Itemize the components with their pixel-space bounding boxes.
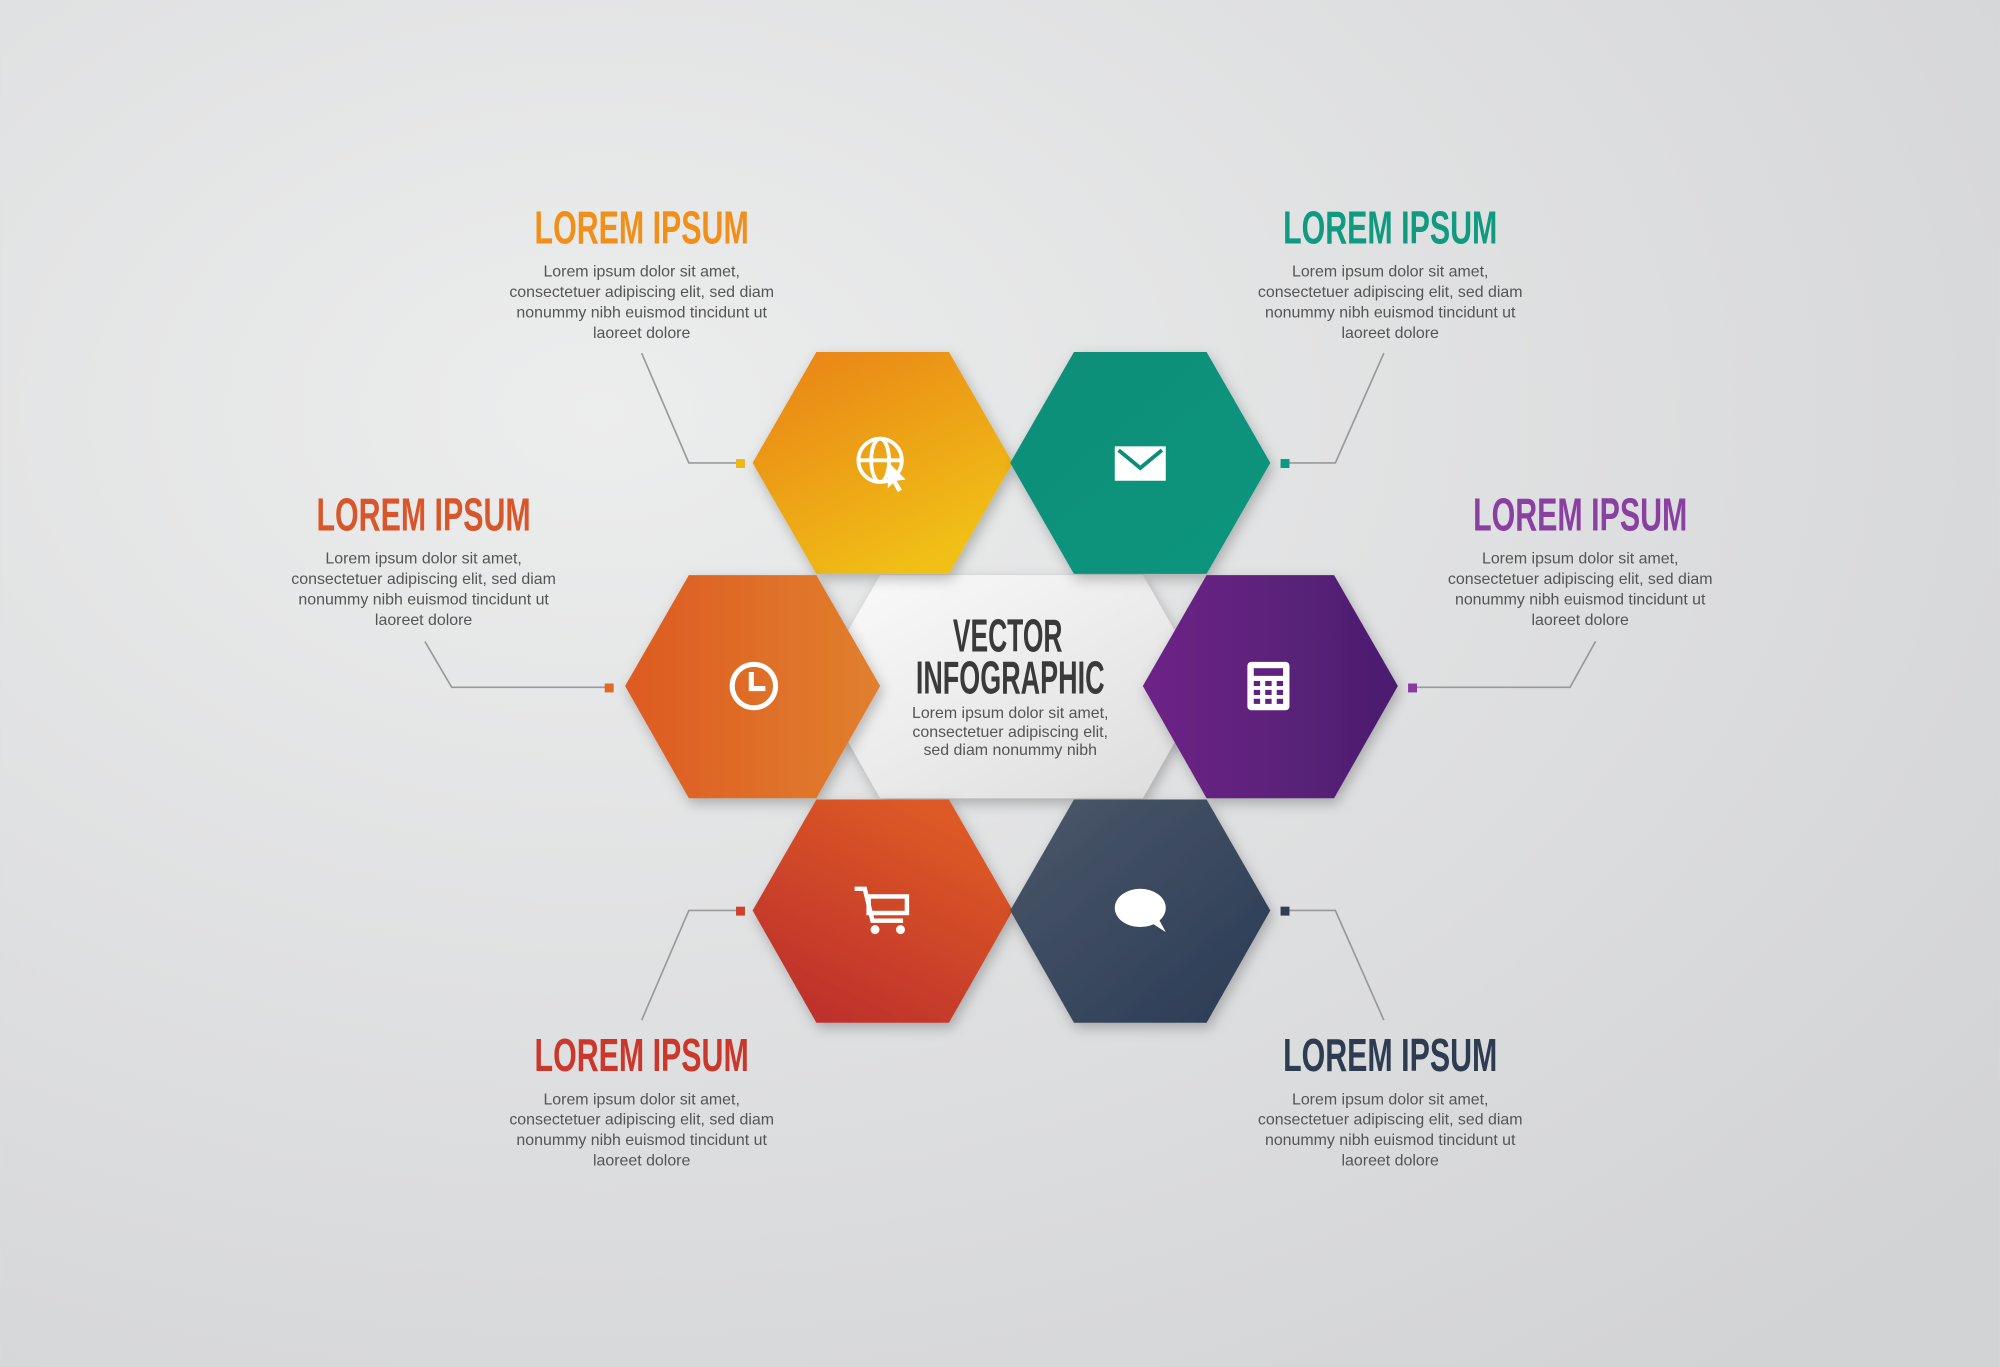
hexagon: purple calculator bbox=[1143, 575, 1398, 798]
text block: top right: laoreet dolore bbox=[1342, 325, 1439, 342]
hexagon: orange globe bbox=[753, 352, 1013, 574]
icon: cart bbox=[855, 889, 907, 921]
text block: bottom left: LOREM IPSUM bbox=[535, 1029, 749, 1081]
center text: consectetuer adipiscing elit, bbox=[912, 724, 1108, 741]
text block: bottom left: laoreet dolore bbox=[593, 1153, 690, 1170]
text block: bottom left: consectetuer adipiscing elit, sed diam bbox=[509, 1112, 774, 1129]
text block: top right: Lorem ipsum dolor sit amet, bbox=[1292, 264, 1488, 281]
center text: INFOGRAPHIC bbox=[916, 652, 1105, 704]
hexagon: teal mail bbox=[1010, 352, 1270, 574]
text block: bottom right: LOREM IPSUM bbox=[1283, 1029, 1497, 1081]
text block: top right: consectetuer adipiscing elit, sed diam bbox=[1258, 284, 1523, 301]
text block: right: nonummy nibh euismod tincidunt ut bbox=[1455, 591, 1706, 608]
text block: right: LOREM IPSUM bbox=[1473, 488, 1687, 540]
text block: top right: LOREM IPSUM bbox=[1283, 202, 1497, 254]
text block: left: nonummy nibh euismod tincidunt ut bbox=[298, 591, 549, 608]
center text bbox=[912, 610, 1108, 759]
center text: Lorem ipsum dolor sit amet, bbox=[912, 705, 1108, 722]
text block: bottom left: Lorem ipsum dolor sit amet, bbox=[543, 1091, 740, 1108]
text block: left: laoreet dolore bbox=[375, 612, 472, 629]
text block: bottom left: nonummy nibh euismod tincidunt ut bbox=[516, 1132, 767, 1149]
hexagon: dark chat bbox=[1010, 800, 1270, 1023]
text block: left bbox=[291, 488, 556, 629]
text block: bottom left bbox=[509, 1029, 774, 1170]
text block: top left bbox=[509, 202, 774, 342]
icon: speech bubble bbox=[1115, 889, 1166, 932]
hexagon: red cart bbox=[753, 800, 1013, 1023]
text block: bottom right: Lorem ipsum dolor sit amet, bbox=[1292, 1091, 1488, 1108]
text block: top left: laoreet dolore bbox=[593, 325, 690, 342]
icon: envelope bbox=[1115, 446, 1166, 481]
text block: bottom right: consectetuer adipiscing elit, sed diam bbox=[1258, 1112, 1523, 1129]
center hexagon bbox=[816, 575, 1207, 798]
hexagon: orange clock bbox=[625, 575, 880, 798]
text block: right: consectetuer adipiscing elit, sed diam bbox=[1448, 571, 1713, 588]
icon: calculator bbox=[1247, 662, 1289, 710]
text block: right: laoreet dolore bbox=[1532, 612, 1629, 629]
text block: top right bbox=[1258, 202, 1523, 342]
text block: right bbox=[1448, 488, 1713, 629]
text block: left: consectetuer adipiscing elit, sed diam bbox=[291, 571, 556, 588]
text block: top left: nonummy nibh euismod tincidunt ut bbox=[516, 305, 767, 322]
center text: VECTOR bbox=[953, 610, 1062, 662]
icon: globe cursor bbox=[858, 439, 902, 482]
icon: clock bbox=[732, 664, 776, 708]
text block: top left: Lorem ipsum dolor sit amet, bbox=[543, 264, 740, 281]
text block: bottom right bbox=[1258, 1029, 1523, 1170]
text block: top right: nonummy nibh euismod tincidunt ut bbox=[1265, 305, 1516, 322]
text block: right: Lorem ipsum dolor sit amet, bbox=[1482, 551, 1678, 568]
text block: bottom right: laoreet dolore bbox=[1342, 1153, 1439, 1170]
text block: left: Lorem ipsum dolor sit amet, bbox=[325, 551, 522, 568]
text block: top left: consectetuer adipiscing elit, sed diam bbox=[509, 284, 774, 301]
connectors bbox=[425, 353, 1596, 1020]
center text: sed diam nonummy nibh bbox=[923, 742, 1097, 759]
text block: top left: LOREM IPSUM bbox=[535, 202, 749, 254]
text block: left: LOREM IPSUM bbox=[317, 488, 531, 540]
text block: bottom right: nonummy nibh euismod tincidunt ut bbox=[1265, 1132, 1516, 1149]
